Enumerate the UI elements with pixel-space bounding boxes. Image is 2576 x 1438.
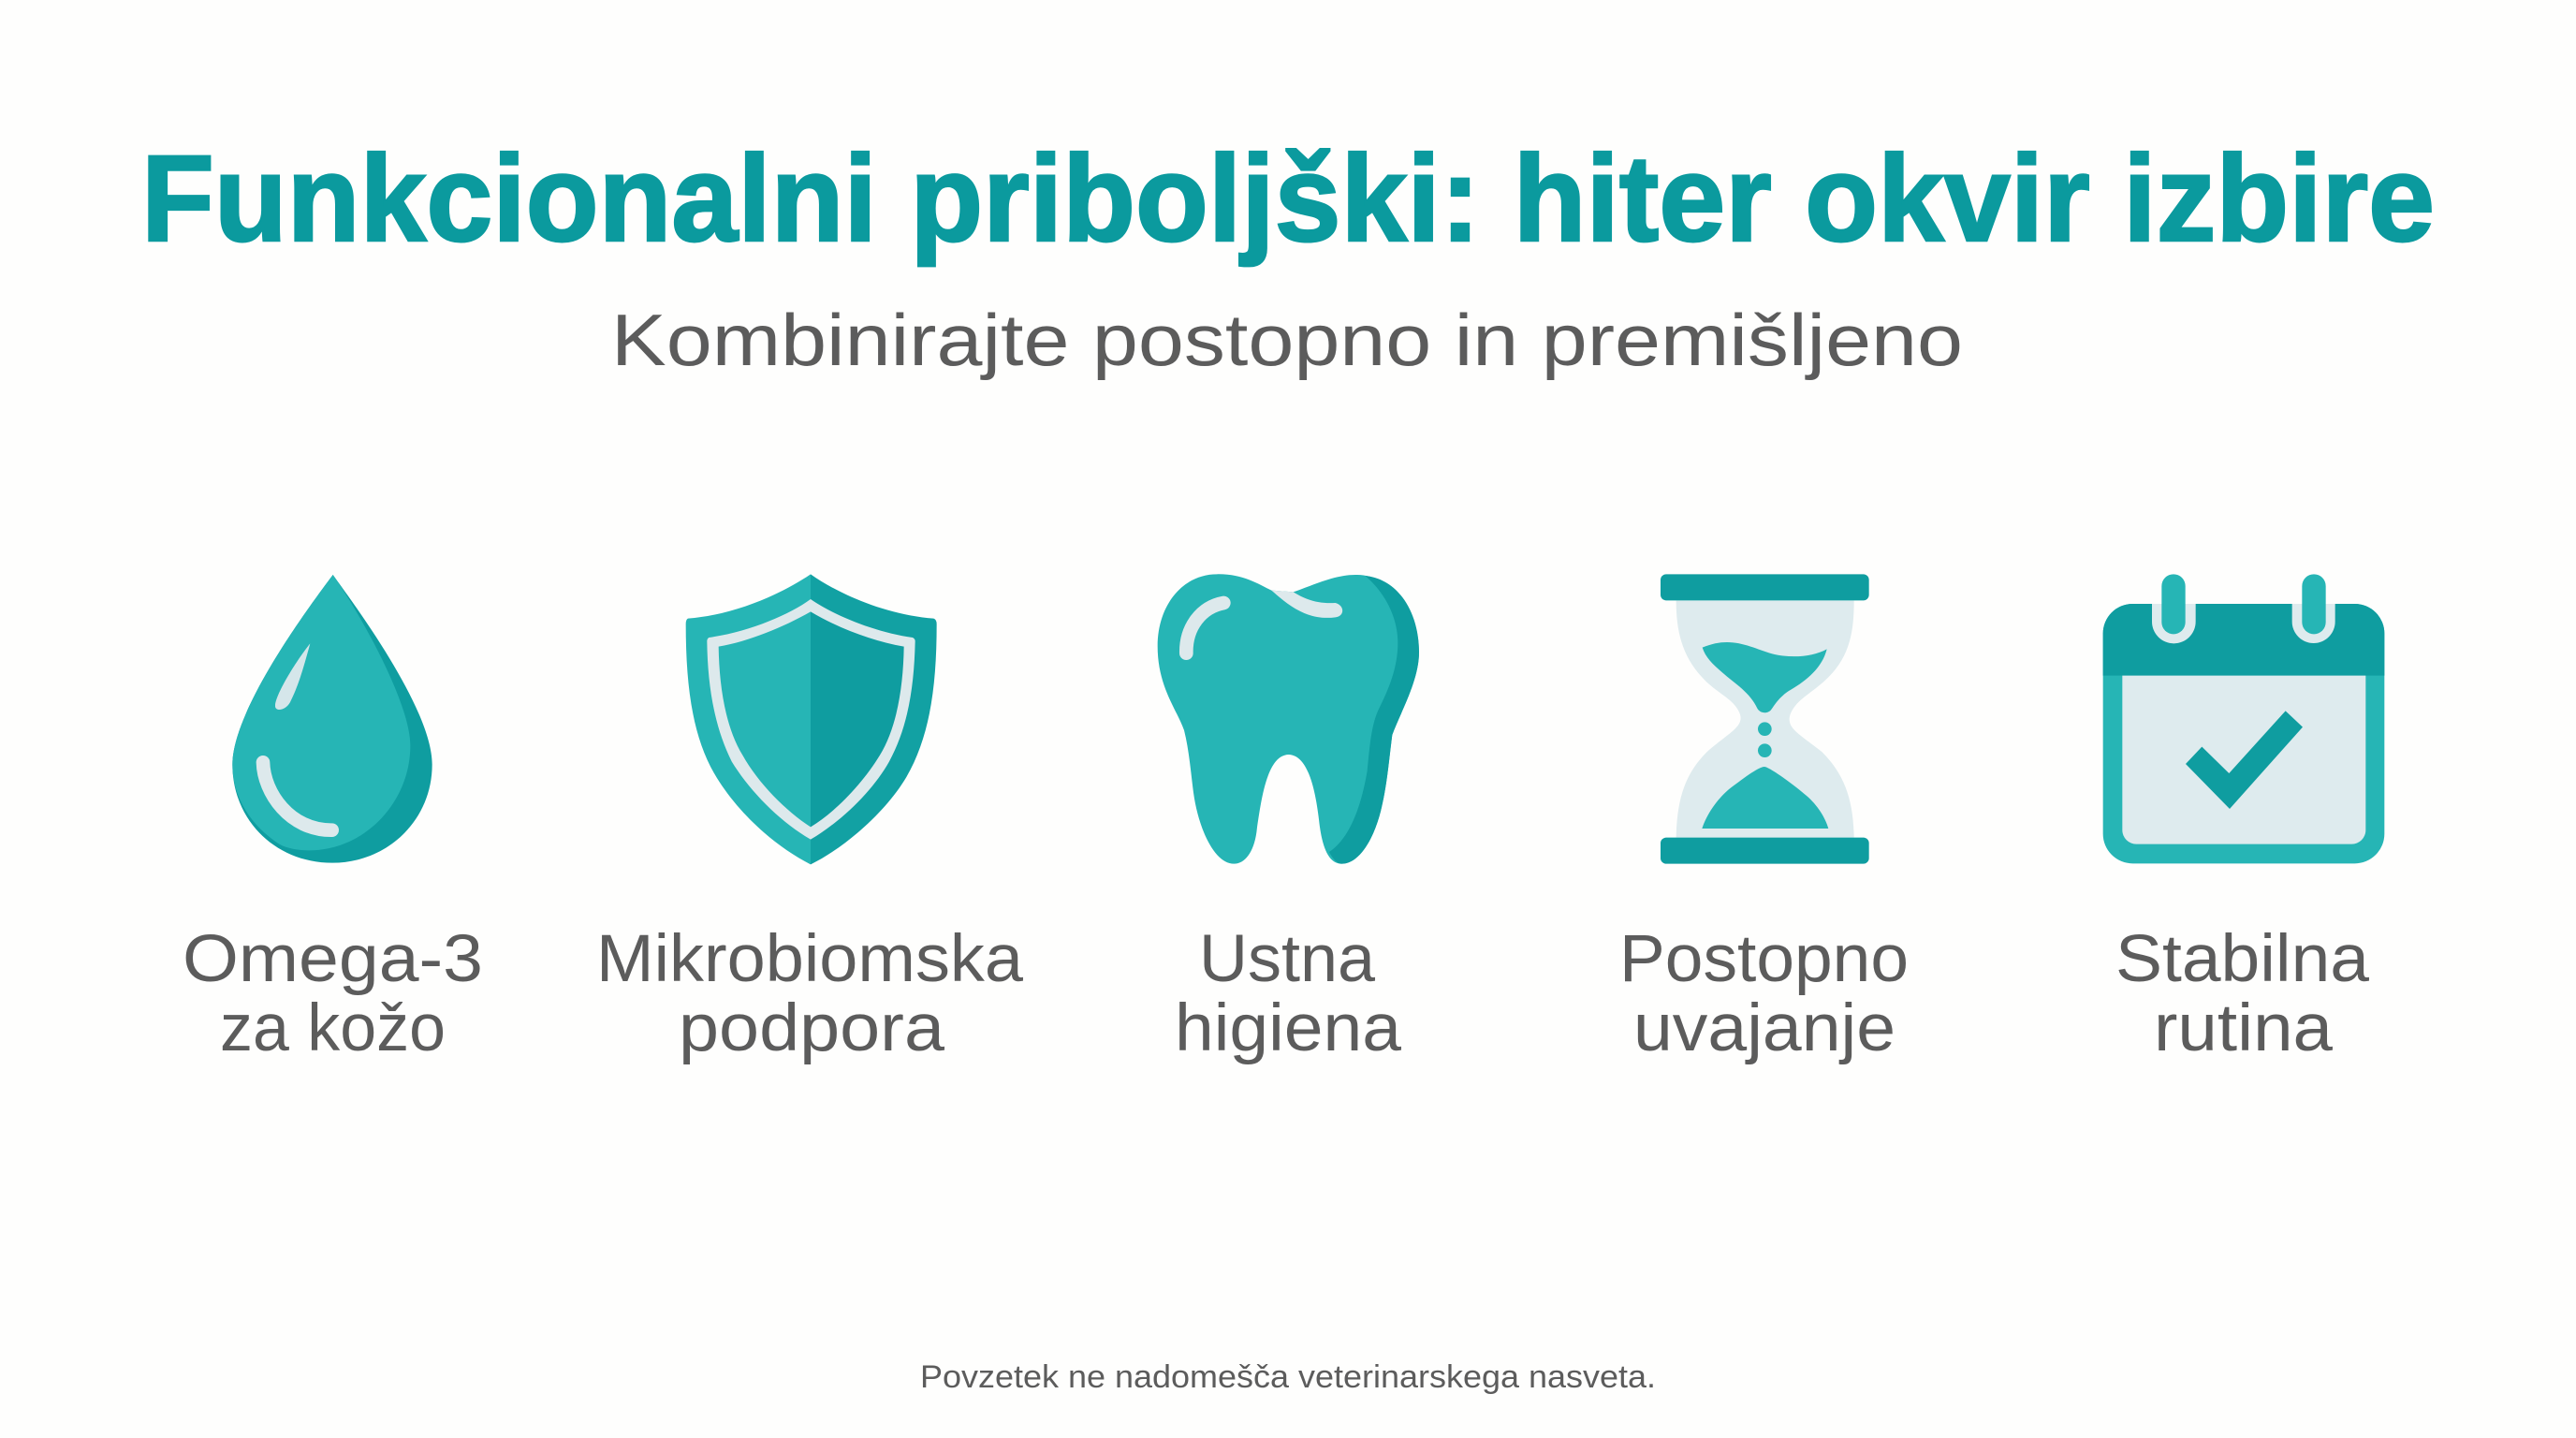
label: Postopno uvajanje: Postopno xyxy=(1619,922,1909,996)
icon: water drop xyxy=(232,575,432,863)
icon: shield xyxy=(686,574,937,864)
label: Mikrobiomska podpora: Mikrobiomska xyxy=(596,922,1024,996)
subtitle: Kombinirajte postopno in premišljeno xyxy=(611,299,1963,381)
label: Mikrobiomska podpora: podpora xyxy=(679,991,945,1065)
label: Postopno uvajanje: uvajanje xyxy=(1633,991,1895,1065)
footer disclaimer: Povzetek ne nadomešča veterinarskega nasveta. xyxy=(920,1359,1656,1395)
icon: calendar with check xyxy=(2103,574,2384,863)
label: Ustna higiena: higiena xyxy=(1175,991,1402,1065)
label: Postopno uvajanje xyxy=(1619,922,1909,1065)
label: Ustna higiena: Ustna xyxy=(1199,922,1376,996)
label: Omega-3 za kožo: Omega-3 xyxy=(183,922,483,996)
label: Omega-3 za kožo xyxy=(183,922,483,1065)
title: Funkcionalni priboljški: hiter okvir izbire xyxy=(141,129,2435,267)
icon: tooth xyxy=(1158,574,1419,864)
label: Stabilna rutina: rutina xyxy=(2154,991,2334,1065)
label: Ustna higiena xyxy=(1175,922,1402,1065)
label: Stabilna rutina xyxy=(2115,922,2370,1065)
icon: hourglass xyxy=(1661,574,1869,864)
label: Omega-3 za kožo: za kožo xyxy=(220,991,446,1065)
label: Stabilna rutina: Stabilna xyxy=(2115,922,2370,996)
label: Mikrobiomska podpora xyxy=(596,922,1024,1065)
